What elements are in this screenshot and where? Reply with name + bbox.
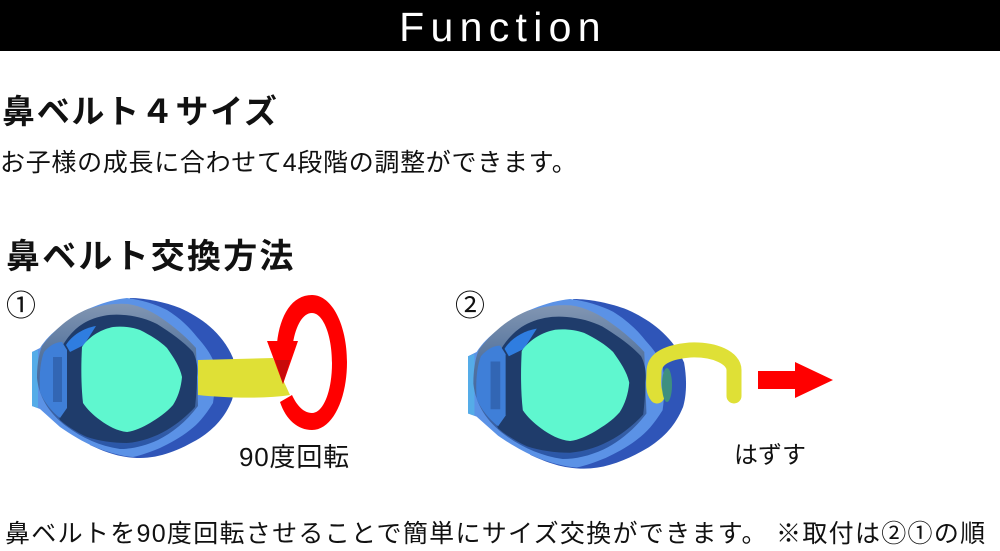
green clip (662, 368, 672, 402)
title bar: Function (0, 0, 1000, 51)
heading: how to change nose belt: 鼻ベルト交換方法 (6, 238, 296, 276)
yellow hook belt (654, 350, 734, 396)
step number 2: ② (455, 290, 485, 323)
yellow belt turned (198, 358, 290, 398)
label: 90 degree rotation: 90度回転 (239, 442, 350, 472)
text: four-step adjustment: お子様の成長に合わせて4段階の調整ができます。 (0, 149, 578, 177)
caption: 鼻ベルトを90度回転させることで簡単にサイズ交換ができます。 ※取付は②①の順 (5, 520, 986, 548)
red arrow right (758, 362, 833, 398)
title bar: Function: Function (399, 4, 607, 50)
goggle 1 (32, 298, 235, 458)
red rotation arrow (267, 295, 347, 430)
heading: nose belt 4 sizes: 鼻ベルト４サイズ (2, 93, 279, 130)
goggle 2 (468, 299, 686, 469)
label: remove: はずす (734, 442, 806, 469)
step number 1: ① (6, 290, 36, 323)
